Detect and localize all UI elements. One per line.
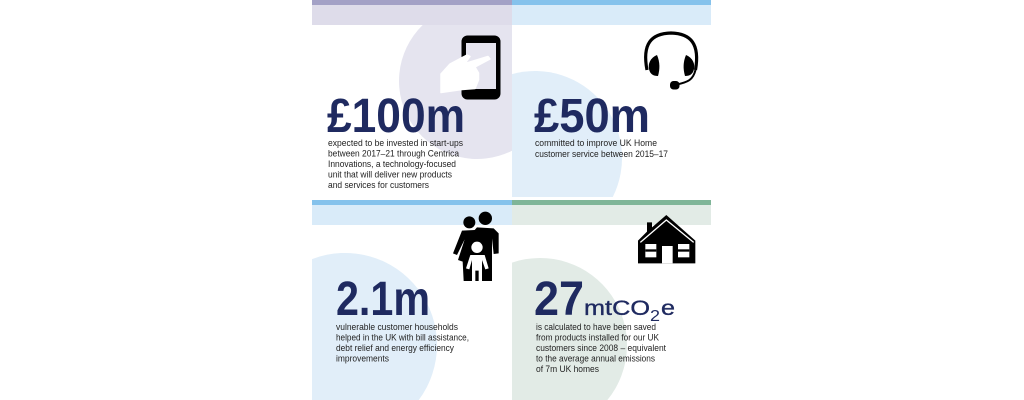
figure: 27 mtCO2e: mtCO [584,297,650,320]
text: households description: improvements [336,354,389,364]
background circle: green [512,258,627,400]
background circle: lilac [399,25,512,159]
text: carbon savings description: is calculated to have been saved [536,322,656,333]
header band: blue [312,200,512,225]
text: carbon savings description: of 7m UK homes [536,364,599,375]
text: start-up investment description: and services for customers [328,180,429,191]
header band: green [512,200,711,225]
text: customer service description [535,138,668,160]
figure: £100m: £100m [327,90,465,143]
icon: headset [646,33,697,90]
text: start-up investment description [328,138,463,191]
text: carbon savings description: from products installed for our UK [536,332,660,344]
figure: £50m: £50m [534,90,650,143]
text: households description: helped in the UK with bill assistance, [336,332,469,344]
icon: house [638,215,695,263]
panel: vulnerable households [312,200,512,400]
figure: 27 mtCO2e: 27 [534,273,584,326]
icon: tablet with pointing hand [441,36,500,100]
background circle: blue [512,71,622,197]
text: households description: vulnerable customer households [336,322,458,333]
text: customer service description: committed to improve UK Home [535,138,657,149]
text: carbon savings description: customers since 2008 – equivalent [536,343,666,354]
figure: 27 mtCO2e [534,273,675,326]
text: households description [336,322,469,364]
text: households description: debt relief and energy efficiency [336,343,454,354]
figure: 2.1m: 2.1m [336,273,430,326]
icon: family [453,212,499,281]
header band: blue [512,0,711,25]
figure: 27 mtCO2e: e [661,297,675,320]
text: start-up investment description: Innovations, a technology-focused [328,159,456,170]
text: customer service description: customer service between 2015–17 [535,149,668,160]
panel: customer service [512,0,711,197]
header band: lilac [312,0,512,25]
panel: start-up investment [312,0,512,191]
text: carbon savings description [536,322,666,375]
text: carbon savings description: to the average annual emissions [536,354,655,364]
text: start-up investment description: expected to be invested in start-ups [328,138,463,149]
figure: 27 mtCO2e: 2 [650,308,660,325]
background circle: blue [312,253,437,400]
text: start-up investment description: unit that will deliver new products [328,170,452,180]
text: start-up investment description: between 2017–21 through Centrica [328,148,460,160]
panel: carbon savings [512,200,711,400]
